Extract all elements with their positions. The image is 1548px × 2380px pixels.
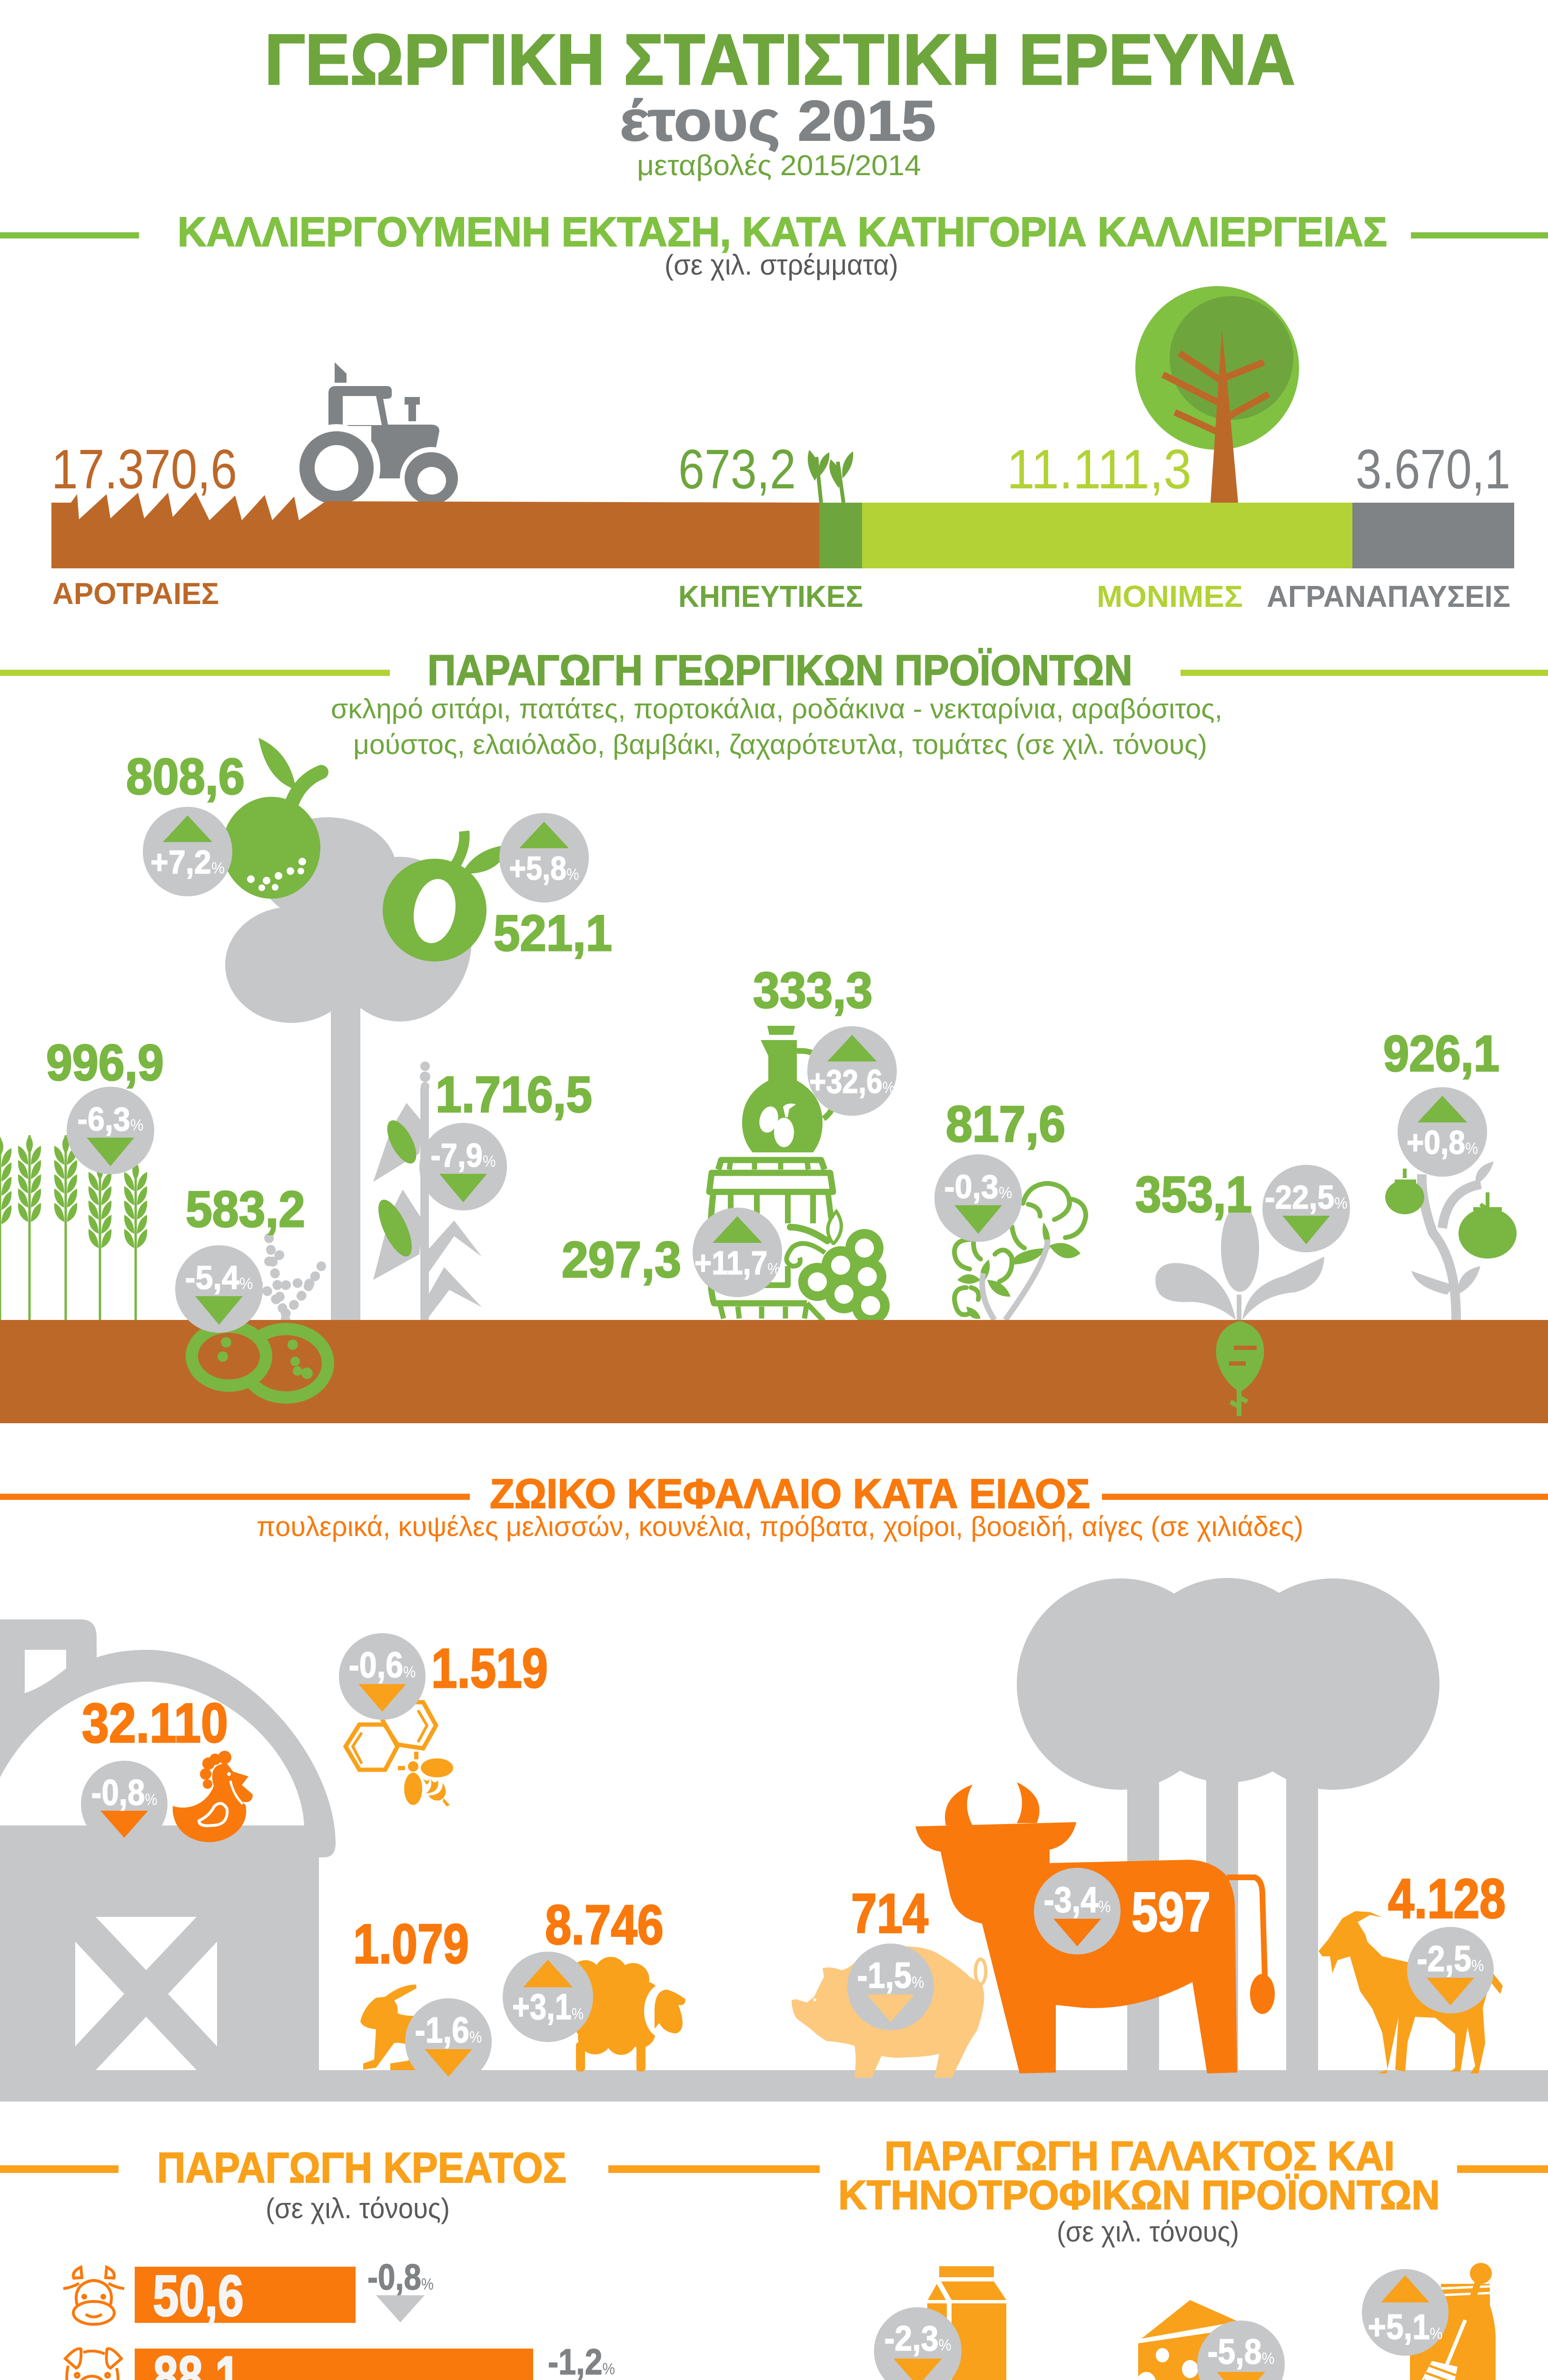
- values: crops: 297,3: [562, 1231, 681, 1288]
- badge: corn -7,9%: [419, 1123, 507, 1210]
- values: livestock: 32.110: [82, 1692, 228, 1754]
- values: livestock: 1.079: [353, 1913, 469, 1975]
- trees: [1017, 1578, 1439, 2075]
- values: livestock: 597: [1131, 1881, 1211, 1943]
- values: livestock: 4.128: [1388, 1867, 1506, 1930]
- badge: corn -7,9%: -7,9%: [430, 1137, 496, 1174]
- badge: cattle -3,4%: [1034, 1868, 1121, 1954]
- icon: tree: [1135, 286, 1299, 503]
- badge: wheat -6,3%: [67, 1087, 154, 1174]
- ground: [0, 2070, 1548, 2102]
- heading: dairy: [838, 2133, 1440, 2218]
- badge: sugar beet -22,5%: [1262, 1165, 1350, 1252]
- values: crops: 808,6: [126, 748, 245, 805]
- badge: poultry -0,8%: -0,8%: [91, 1773, 157, 1813]
- soil: [0, 1320, 1548, 1423]
- icon: cotton: [954, 1183, 1086, 1320]
- panel: livestock: [0, 1471, 1548, 2102]
- bar chart: meat: [135, 2257, 787, 2380]
- badge: peaches +5,8%: +5,8%: [509, 850, 579, 887]
- badge: milk -2,3%: [874, 2307, 962, 2380]
- livestock list text: πουλερικά, κυψέλες μελισσών, κουνέλια, πρόβατα, χοίροι, βοοειδή, αίγες (σε χιλιάδες): [257, 1511, 1303, 1542]
- values: crops: 521,1: [494, 904, 612, 962]
- heading: dairy: ΚΤΗΝΟΤΡΟΦΙΚΩΝ ΠΡΟΪΟΝΤΩΝ: [838, 2172, 1440, 2218]
- values: crops: 817,6: [946, 1095, 1065, 1152]
- values: livestock: 8.746: [545, 1894, 664, 1956]
- subtitle: changes: μεταβολές 2015/2014: [637, 149, 921, 181]
- badge: oranges +7,2%: +7,2%: [150, 843, 225, 881]
- badge: olive oil +32,6%: [807, 1026, 897, 1116]
- badge: rabbits -1,6%: -1,6%: [415, 2010, 482, 2051]
- heading: livestock: ΖΩΙΚΟ ΚΕΦΑΛΑΙΟ ΚΑΤΑ ΕΙΔΟΣ: [490, 1471, 1090, 1517]
- badge: honey +5,1%: [1362, 2269, 1449, 2356]
- badge: cheese -5,8%: -5,8%: [1207, 2332, 1275, 2371]
- icon: peach: [383, 831, 509, 962]
- heading: cultivated area: ΚΑΛΛΙΕΡΓΟΥΜΕΝΗ ΕΚΤΑΣΗ, ΚΑΤΑ ΚΑΤΗΓΟΡΙΑ ΚΑΛΛΙΕΡΓΕΙΑΣ: [178, 209, 1387, 255]
- label: arable: ΑΡΟΤΡΑΙΕΣ: [52, 576, 219, 611]
- values: crops: 353,1: [1135, 1166, 1252, 1223]
- crop list text: σκληρό σιτάρι, πατάτες, πορτοκάλια, ροδάκινα - νεκταρίνια, αραβόσιτος,: [331, 694, 1222, 724]
- icon: rabbit: [360, 1984, 434, 2070]
- unit note: (σε χιλ. στρέμματα): [665, 249, 898, 281]
- icon: beet root: [1216, 1321, 1264, 1416]
- icon: goat: [1319, 1911, 1503, 2073]
- icon: wine barrel: [709, 1160, 833, 1321]
- heading: crop production: ΠΑΡΑΓΩΓΗ ΓΕΩΡΓΙΚΩΝ ΠΡΟΪΟΝΤΩΝ: [427, 647, 1132, 694]
- icons: animal heads: [60, 2267, 127, 2380]
- icon: big grey tree: [225, 817, 472, 1323]
- icon: tomato plant: [1385, 1161, 1517, 1320]
- badge: must +11,7%: [693, 1208, 782, 1297]
- value: vegetables: 673,2: [678, 438, 796, 500]
- icon: wheat: [0, 1135, 147, 1352]
- badge: sugar beet -22,5%: -22,5%: [1265, 1179, 1348, 1216]
- value: arable: 17.370,6: [51, 438, 237, 500]
- icon: honeycomb and bee: [346, 1702, 453, 1806]
- badge: pigs -1,5%: -1,5%: [857, 1955, 924, 1996]
- icon: chicken: [173, 1751, 253, 1842]
- icon: cheese: [1136, 2300, 1238, 2380]
- icon: sprout: [808, 450, 853, 503]
- badge: milk -2,3%: -2,3%: [884, 2319, 951, 2358]
- bar chart: meat: -0,8%: [367, 2257, 434, 2298]
- barn: [0, 1619, 336, 2070]
- values: crops: 583,2: [186, 1180, 305, 1238]
- panel: crop production: [0, 647, 1548, 1423]
- icon: potato sprig: [252, 1238, 321, 1320]
- badge: honey +5,1%: +5,1%: [1368, 2307, 1443, 2347]
- icon: honey jar: [1410, 2263, 1496, 2380]
- heading: meat production: ΠΑΡΑΓΩΓΗ ΚΡΕΑΤΟΣ: [157, 2144, 566, 2192]
- title: ΓΕΩΡΓΙΚΗ ΣΤΑΤΙΣΤΙΚΗ ΕΡΕΥΝΑ: [265, 19, 1295, 99]
- icon: pig: [792, 1946, 986, 2078]
- icon: cow: [915, 1782, 1275, 2073]
- badge: cheese -5,8%: [1197, 2320, 1285, 2380]
- badge: goats -2,5%: [1407, 1927, 1494, 2013]
- values: livestock: 714: [851, 1882, 928, 1944]
- badge: potatoes -5,4%: -5,4%: [185, 1259, 253, 1296]
- values: crops: 996,9: [46, 1034, 164, 1091]
- values: crops: [46, 748, 1499, 1288]
- panel: meat production: [0, 2144, 820, 2380]
- icon: corn plant: [372, 1061, 482, 1321]
- badge: peaches +5,8%: [499, 813, 589, 902]
- badge: olive oil +32,6%: +32,6%: [809, 1063, 895, 1100]
- values: crops: 1.716,5: [436, 1066, 592, 1123]
- subtitle: year: έτους 2015: [620, 89, 936, 153]
- heading: dairy: ΠΑΡΑΓΩΓΗ ΓΑΛΑΚΤΟΣ ΚΑΙ: [884, 2133, 1395, 2179]
- crop list text: μούστος, ελαιόλαδο, βαμβάκι, ζαχαρότευτλα, τομάτες (σε χιλ. τόνους): [353, 729, 1207, 760]
- unit note: (σε χιλ. τόνους): [266, 2192, 450, 2224]
- panel: cultivated area: [0, 209, 1548, 614]
- stacked bar: cultivated area by category: [51, 492, 1514, 568]
- crop list text: [331, 694, 1222, 760]
- label: permanent: ΜΟΝΙΜΕΣ: [1097, 579, 1243, 614]
- badge: pigs -1,5%: [847, 1944, 934, 2030]
- values: livestock: 1.519: [431, 1637, 548, 1699]
- badge: must +11,7%: +11,7%: [695, 1244, 780, 1281]
- badge: goats -2,5%: -2,5%: [1417, 1939, 1484, 1979]
- icon: milk carton: [927, 2266, 1006, 2380]
- unit note: (σε χιλ. τόνους): [1057, 2216, 1239, 2248]
- value: fallow: 3.670,1: [1356, 438, 1510, 500]
- bar chart: meat: 50,6: [153, 2263, 244, 2328]
- label: fallow: ΑΓΡΑΝΑΠΑΥΣΕΙΣ: [1267, 579, 1510, 614]
- badge: rabbits -1,6%: [405, 1998, 492, 2085]
- value: permanent: 11.111,3: [1007, 438, 1191, 500]
- values: crops: 926,1: [1383, 1025, 1499, 1082]
- values: crops: 333,3: [753, 962, 873, 1019]
- icon: olive oil jug: [742, 1026, 834, 1152]
- badge: poultry -0,8%: [81, 1761, 168, 1847]
- badge: cotton -0,3%: -0,3%: [944, 1168, 1012, 1205]
- badge: sheep +3,1%: +3,1%: [512, 1987, 584, 2027]
- icon: grey tractor: [293, 362, 463, 512]
- badge: tomatoes +0,8%: [1398, 1087, 1487, 1177]
- badge: wheat -6,3%: -6,3%: [77, 1101, 144, 1138]
- icon: cow head: [63, 2267, 124, 2324]
- icon: sugar beet: [1155, 1204, 1324, 1320]
- label: vegetables: ΚΗΠΕΥΤΙΚΕΣ: [678, 579, 863, 614]
- icon: orange: [222, 738, 321, 899]
- icon: potatoes: [192, 1327, 328, 1398]
- icon: pig head: [65, 2349, 121, 2380]
- badge: beehives -0,6%: [339, 1633, 426, 1720]
- badge: tomatoes +0,8%: +0,8%: [1407, 1124, 1478, 1161]
- icon: sheep: [567, 1957, 685, 2072]
- icon: grapes: [786, 1211, 890, 1325]
- badge: cotton -0,3%: [934, 1154, 1022, 1242]
- panel: dairy products: [838, 2133, 1548, 2380]
- badge: cattle -3,4%: -3,4%: [1043, 1880, 1111, 1920]
- values: livestock: [82, 1637, 1506, 1975]
- badge: beehives -0,6%: -0,6%: [348, 1645, 416, 1686]
- badge: potatoes -5,4%: [175, 1245, 263, 1333]
- badge: sheep +3,1%: [503, 1952, 593, 2042]
- badge: oranges +7,2%: [143, 807, 232, 896]
